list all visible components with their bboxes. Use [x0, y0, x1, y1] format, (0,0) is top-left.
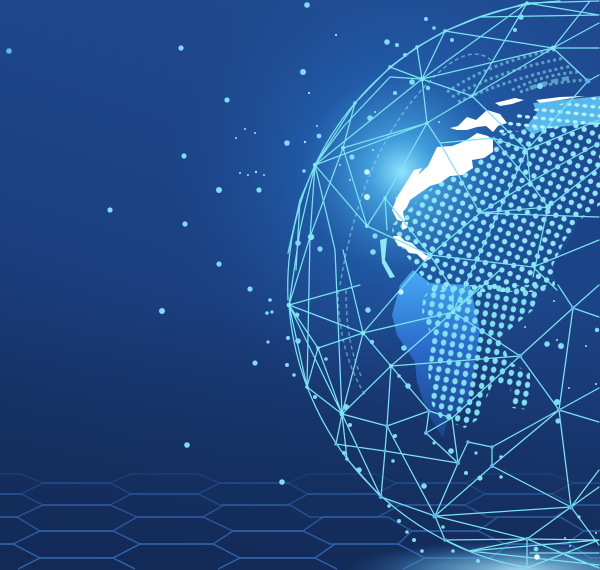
network nodes [287, 1, 590, 416]
continent dots: world map [380, 95, 600, 435]
island: cyan coastline [380, 238, 395, 278]
globe light glow [167, 0, 600, 407]
wireframe globe mesh [288, 1, 599, 568]
dashed latitude arcs at top of globe [447, 50, 586, 102]
continent: light blue northern landmass [525, 96, 600, 135]
dashed meridian arc at left of globe [338, 54, 493, 395]
bottom light glow [345, 540, 600, 570]
network nodes: lower blue [334, 306, 575, 542]
scattered particles: small [235, 34, 597, 547]
continent: white lit coast [392, 96, 585, 262]
hexagon floor grid [0, 474, 600, 569]
globe dark ocean shading [553, 197, 600, 312]
continent: blue southern landmass [392, 270, 480, 438]
